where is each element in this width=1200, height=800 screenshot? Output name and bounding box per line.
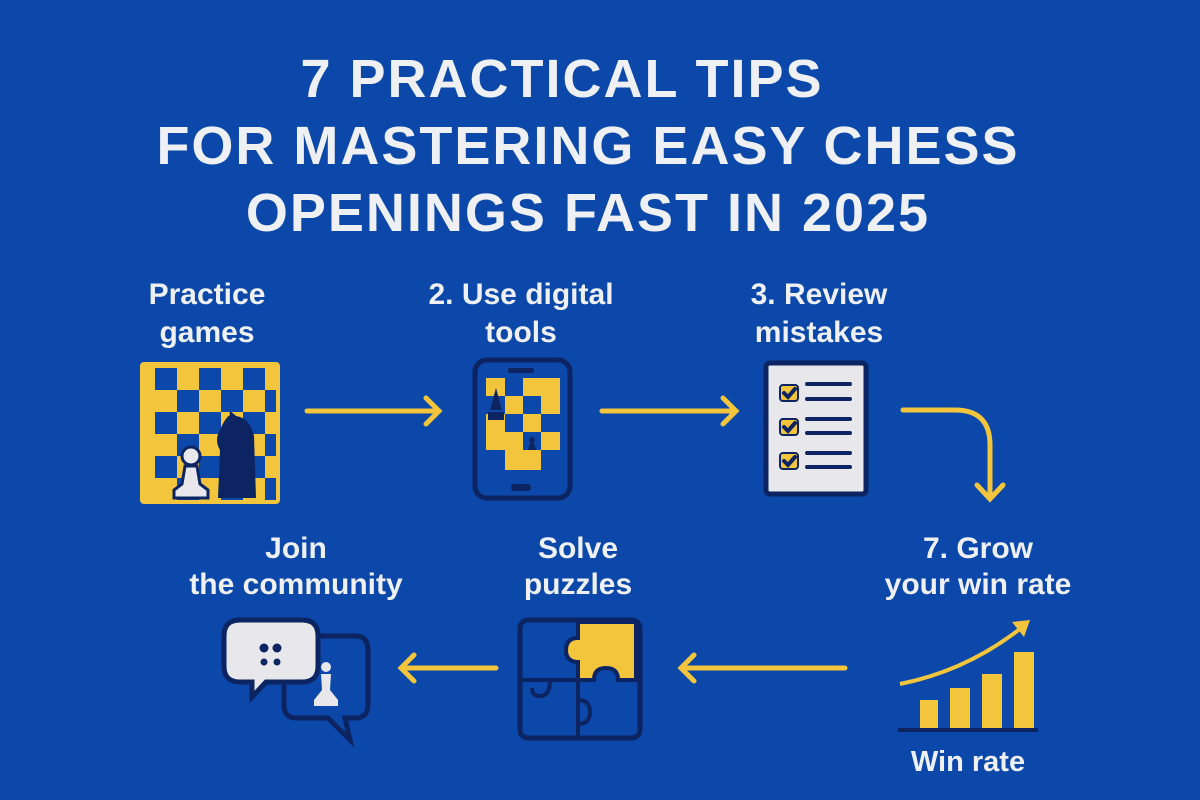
title: FOR MASTERING EASY CHESS bbox=[156, 116, 1020, 176]
icon: phone bbox=[475, 360, 570, 498]
arrow 5 bbox=[401, 655, 496, 681]
label: digital tools: tools bbox=[485, 316, 557, 349]
icon: bar chart bbox=[898, 620, 1038, 732]
arrow 4 bbox=[681, 655, 845, 681]
title: 7 PRACTICAL TIPS bbox=[300, 49, 824, 109]
icon: puzzle bbox=[520, 620, 640, 738]
label: solve puzzles: puzzles bbox=[524, 568, 632, 601]
label: join community: Join bbox=[265, 532, 327, 565]
label: review mistakes: mistakes bbox=[755, 316, 883, 349]
label: win rate: Win rate bbox=[911, 746, 1025, 778]
label: grow win rate bbox=[885, 532, 1071, 601]
label: grow win rate: 7. Grow bbox=[923, 532, 1034, 565]
icon: checklist bbox=[766, 363, 866, 494]
label: digital tools bbox=[428, 278, 614, 349]
arrow 3 curved bbox=[903, 410, 1003, 499]
label: solve puzzles bbox=[524, 532, 632, 601]
label: practice games bbox=[149, 278, 265, 349]
title bbox=[156, 49, 1020, 243]
label: digital tools: 2. Use digital bbox=[428, 278, 614, 311]
label: grow win rate: your win rate bbox=[885, 568, 1071, 601]
arrow 2 bbox=[602, 398, 736, 424]
label: solve puzzles: Solve bbox=[538, 532, 618, 565]
label: review mistakes bbox=[751, 278, 888, 349]
label: join community bbox=[189, 532, 403, 601]
arrow 1 bbox=[307, 398, 439, 424]
label: review mistakes: 3. Review bbox=[751, 278, 888, 311]
label: practice games: games bbox=[159, 316, 255, 349]
icon: chessboard bbox=[140, 362, 280, 504]
icon: chat bubbles bbox=[224, 620, 368, 740]
label: practice games: Practice bbox=[149, 278, 265, 311]
title: OPENINGS FAST IN 2025 bbox=[246, 183, 930, 243]
label: join community: the community bbox=[189, 568, 403, 601]
